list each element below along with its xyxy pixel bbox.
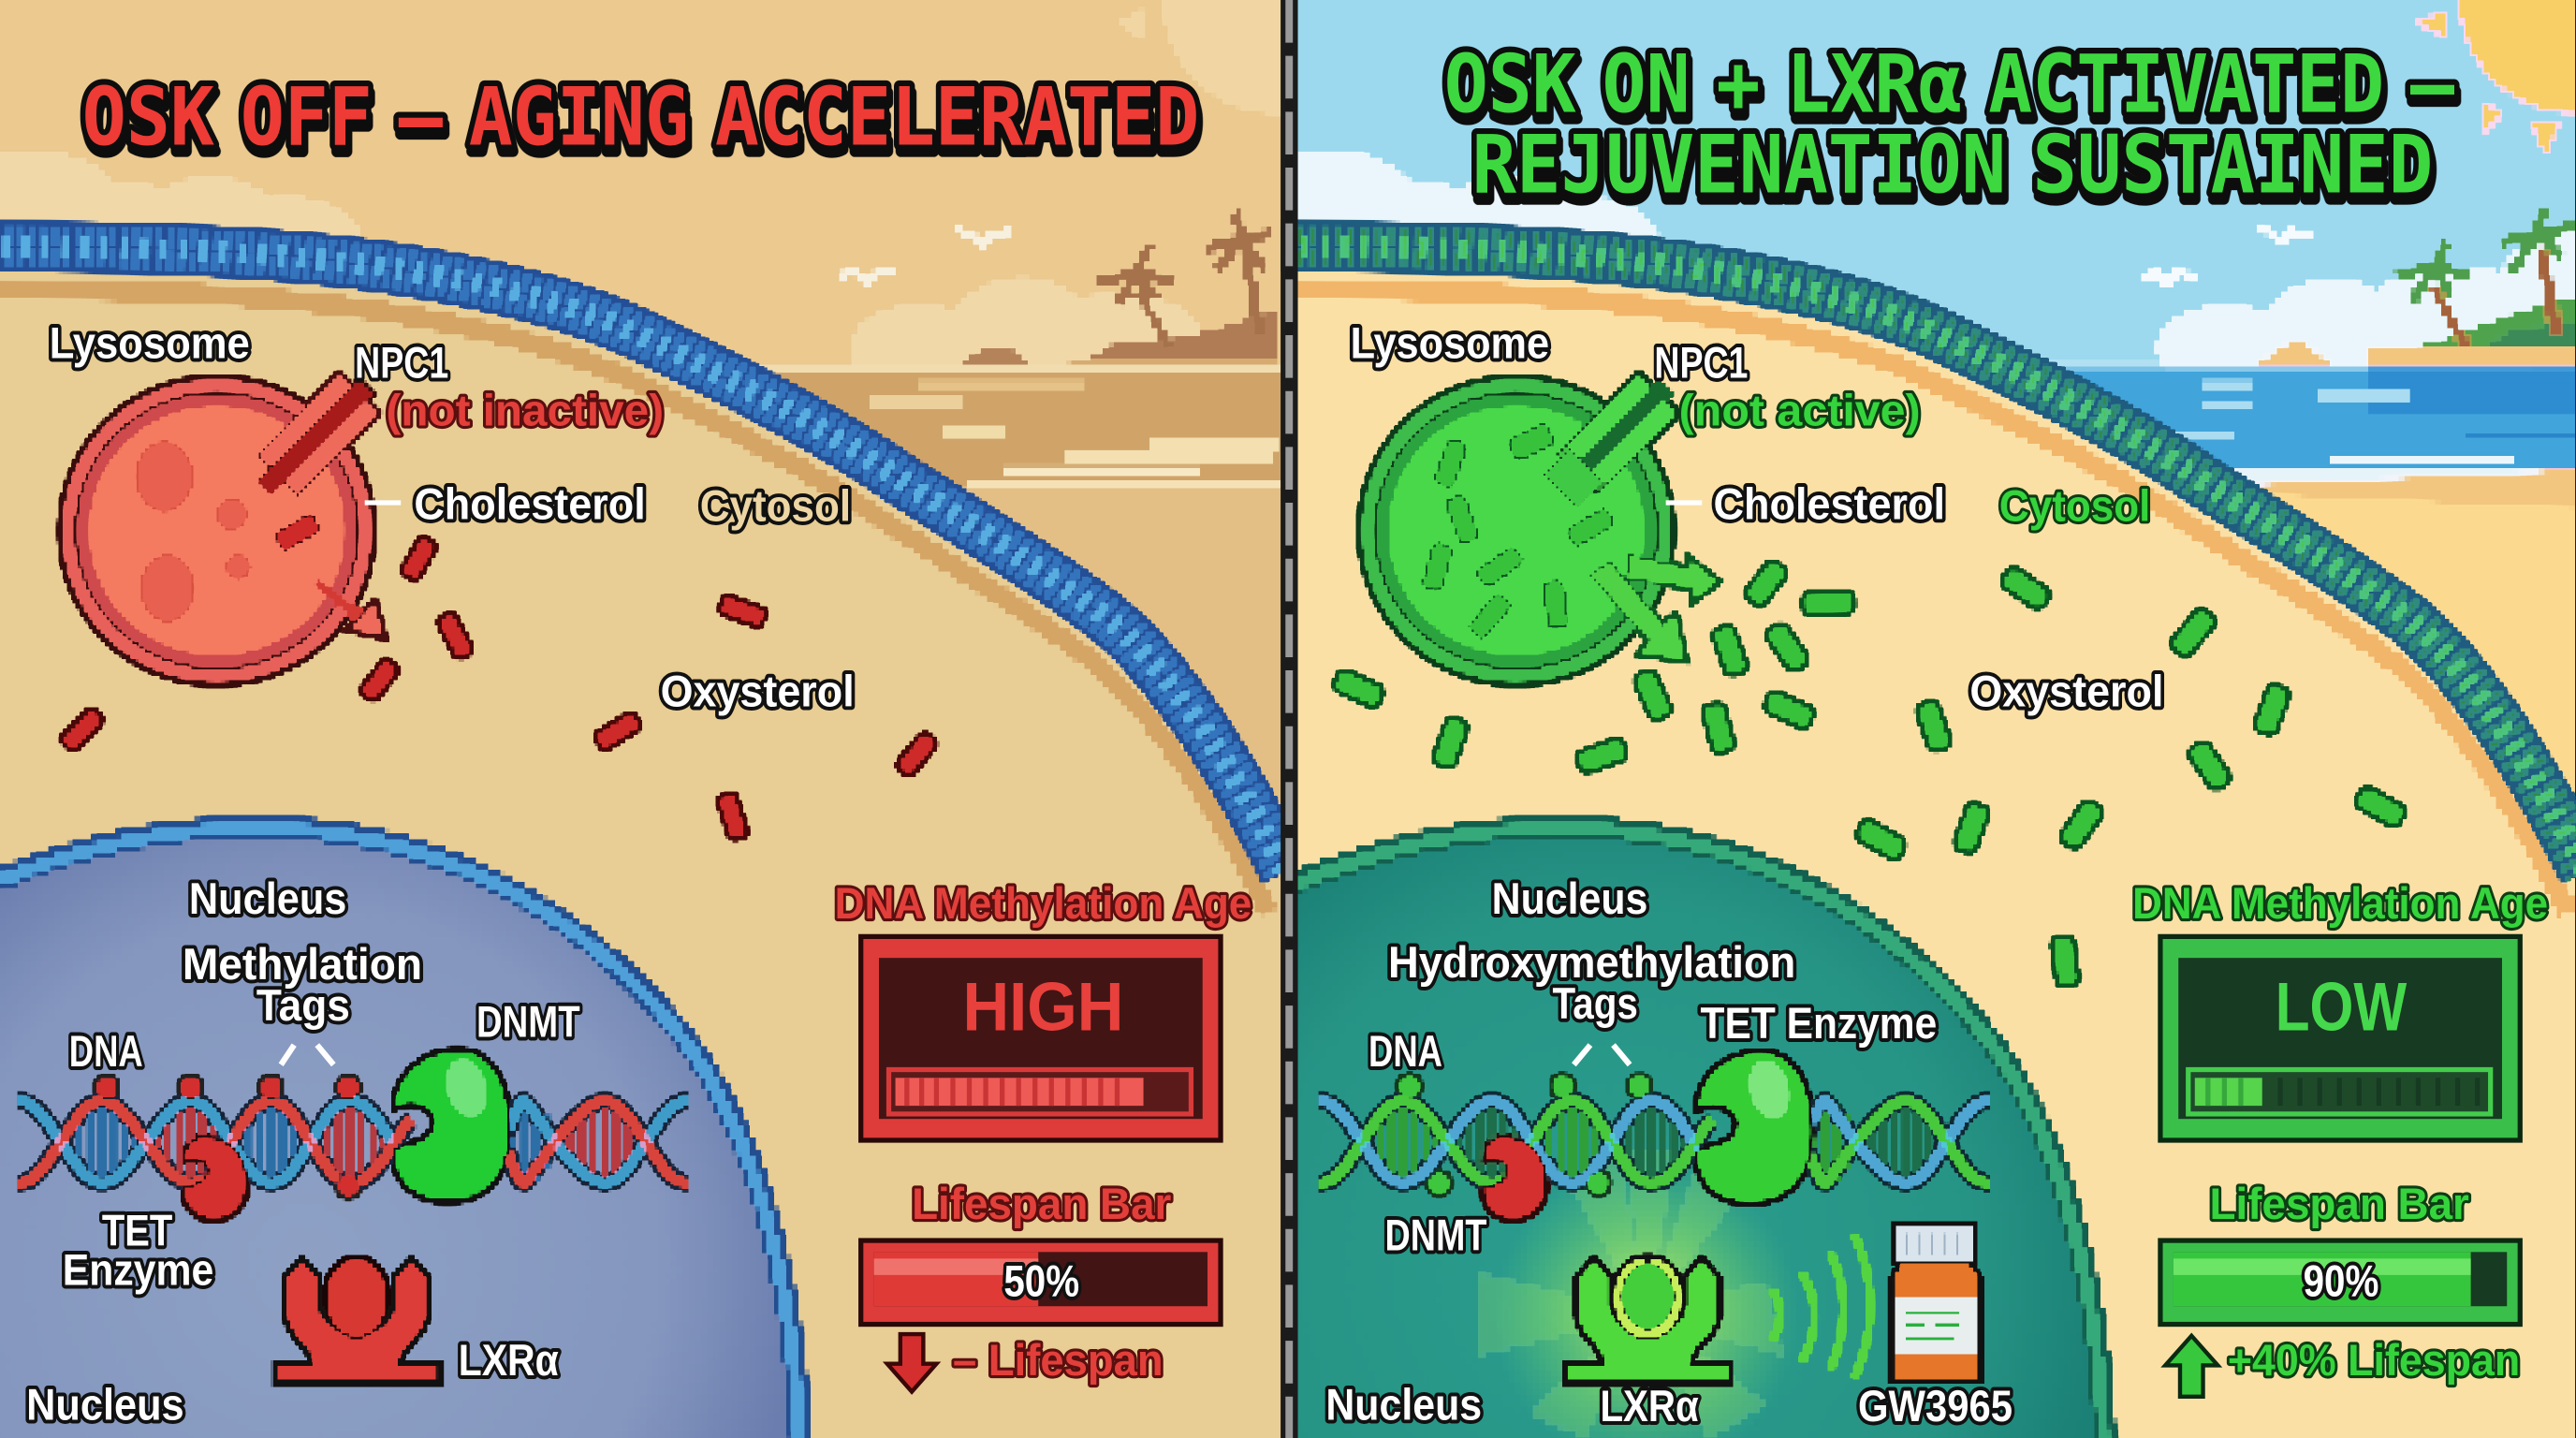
membrane shadow band right [1268, 289, 2569, 914]
text labels right: DNA [1368, 1027, 1442, 1077]
text labels left: NPC1 [355, 339, 448, 389]
text labels right: Hydroxymethylation [1388, 938, 1795, 988]
text labels left: Cytosol [700, 481, 851, 531]
oxysterol rods right [1334, 561, 2406, 985]
text labels right: GW3965 [1858, 1382, 2012, 1431]
LXRα receptor left [276, 1258, 439, 1382]
text labels left: Nucleus [26, 1380, 184, 1430]
sea left [690, 365, 1298, 490]
nucleus right [1280, 829, 2104, 1438]
clouds left [0, 151, 1199, 396]
DNA helix right [1321, 1101, 1988, 1183]
efflux arrows right [1590, 555, 1719, 661]
birds right [2143, 230, 2311, 285]
text labels left: Nucleus [189, 874, 346, 924]
text labels right [1325, 319, 2548, 1431]
hydroxymethylation tags right [1398, 1076, 1650, 1194]
beach sand left [920, 486, 1284, 888]
sea right [1988, 363, 2576, 490]
DNMT enzyme blob right [1484, 1137, 1546, 1219]
clouds right [1297, 152, 2575, 372]
TET enzyme blob left [183, 1137, 246, 1219]
DNMT enzyme blob left [394, 1050, 509, 1201]
lysosome left [61, 378, 373, 683]
text labels left: Lysosome [50, 319, 250, 369]
NPC1 channel left [244, 367, 386, 508]
DNA helix left [20, 1077, 687, 1197]
NPC1 channel right [1541, 367, 1685, 511]
text labels right: Oxysterol [1969, 668, 2163, 717]
lifespan value: 50% [1003, 1257, 1079, 1307]
title left: OSK OFF – AGING ACCELERATED [82, 70, 1199, 164]
lifespan value: 90% [2304, 1257, 2378, 1307]
text labels right: Nucleus [1325, 1380, 1482, 1430]
text labels right: NPC1 [1654, 339, 1748, 389]
lysosome right [1360, 378, 1673, 683]
text labels right: LXRα [1600, 1382, 1699, 1431]
lifespan bar right [2160, 1240, 2520, 1325]
text labels left [26, 319, 1251, 1430]
text labels right: Cytosol [1999, 481, 2150, 531]
text labels right: Tags [1553, 979, 1638, 1029]
text labels right: DNA Methylation Age [2132, 879, 2548, 929]
membrane shadow band left [0, 289, 1270, 914]
TET enzyme blob right [1697, 1052, 1812, 1203]
title right [1444, 37, 2454, 212]
panel: right OSK on scene [1240, 0, 2576, 1438]
sky: left [0, 0, 1292, 1438]
efflux arrow left [315, 581, 385, 638]
membrane and lysosome art left [0, 246, 1284, 871]
text labels left: Methylation [183, 940, 422, 990]
text labels left: TET [102, 1206, 172, 1255]
text labels left: Enzyme [63, 1245, 213, 1295]
text labels right: Lifespan Bar [2210, 1180, 2469, 1229]
text labels left: DNA [69, 1027, 143, 1077]
text labels left: (not inactive) [386, 387, 664, 436]
text labels left: DNMT [476, 997, 580, 1047]
palm trees right [2395, 207, 2572, 348]
readout value HIGH: HIGH [963, 967, 1123, 1045]
text labels left: DNA Methylation Age [835, 879, 1251, 929]
panel: left OSK off scene [0, 0, 1393, 1438]
readout value LOW: LOW [2276, 967, 2408, 1045]
backdrop art right [1240, 0, 2576, 1438]
text labels right: Lysosome [1351, 319, 1549, 369]
glow rays behind LXRα [1479, 1151, 1797, 1438]
arrow down lifespan [887, 1334, 936, 1392]
signal arcs right [1773, 1236, 1870, 1377]
backdrop art left [0, 0, 1393, 1438]
nucleus left [0, 829, 800, 1438]
divider between panels [1281, 0, 1298, 1438]
beach sand right [2202, 486, 2576, 920]
DNA methylation age readout right [2160, 936, 2520, 1140]
island left [956, 309, 1278, 366]
methylation tag ticks left [281, 1045, 333, 1064]
cell membrane right [1283, 246, 2576, 871]
birds left [840, 230, 1009, 283]
text labels left: Lifespan Bar [912, 1180, 1171, 1229]
cell membrane left [0, 246, 1284, 871]
oxysterol rods left [61, 513, 937, 840]
hydroxymethyl tag ticks right [1573, 1045, 1630, 1064]
icon: pale sun left [1119, 0, 1393, 113]
island right [2254, 296, 2576, 365]
rods inside lysosome right [1422, 422, 1615, 640]
text labels right: Cholesterol [1714, 480, 1945, 530]
text labels left: Oxysterol [661, 668, 855, 717]
lifespan bar left [861, 1240, 1221, 1325]
DNA and protein art left [20, 1050, 687, 1382]
title right: REJUVENATION SUSTAINED [1472, 118, 2433, 212]
cytosol sand left [0, 246, 1284, 1438]
text labels right: TET Enzyme [1701, 999, 1937, 1049]
cytosol sand right [1283, 246, 2576, 1438]
title right: OSK ON + LXRα ACTIVATED – [1444, 37, 2454, 131]
membrane and lysosome art right [1283, 246, 2576, 985]
LXRα receptor right [1567, 1257, 1730, 1382]
icon: sun right [2415, 0, 2576, 157]
DNA and protein art right [1321, 1052, 1988, 1382]
text labels left: Cholesterol [414, 480, 646, 530]
GW3965 bottle [1893, 1225, 1980, 1380]
palm trees left [1097, 211, 1273, 348]
sky right [1297, 0, 2575, 372]
text labels right: +40% Lifespan [2228, 1336, 2520, 1386]
text labels right: DNMT [1385, 1211, 1486, 1261]
arrow up lifespan [2165, 1336, 2217, 1397]
DNA methylation age readout left [861, 936, 1221, 1140]
text labels left: – Lifespan [953, 1336, 1164, 1386]
text labels left: LXRα [459, 1336, 559, 1386]
text labels left: Tags [256, 981, 350, 1031]
text labels right: Nucleus [1492, 874, 1647, 924]
text labels right: (not active) [1679, 387, 1921, 436]
